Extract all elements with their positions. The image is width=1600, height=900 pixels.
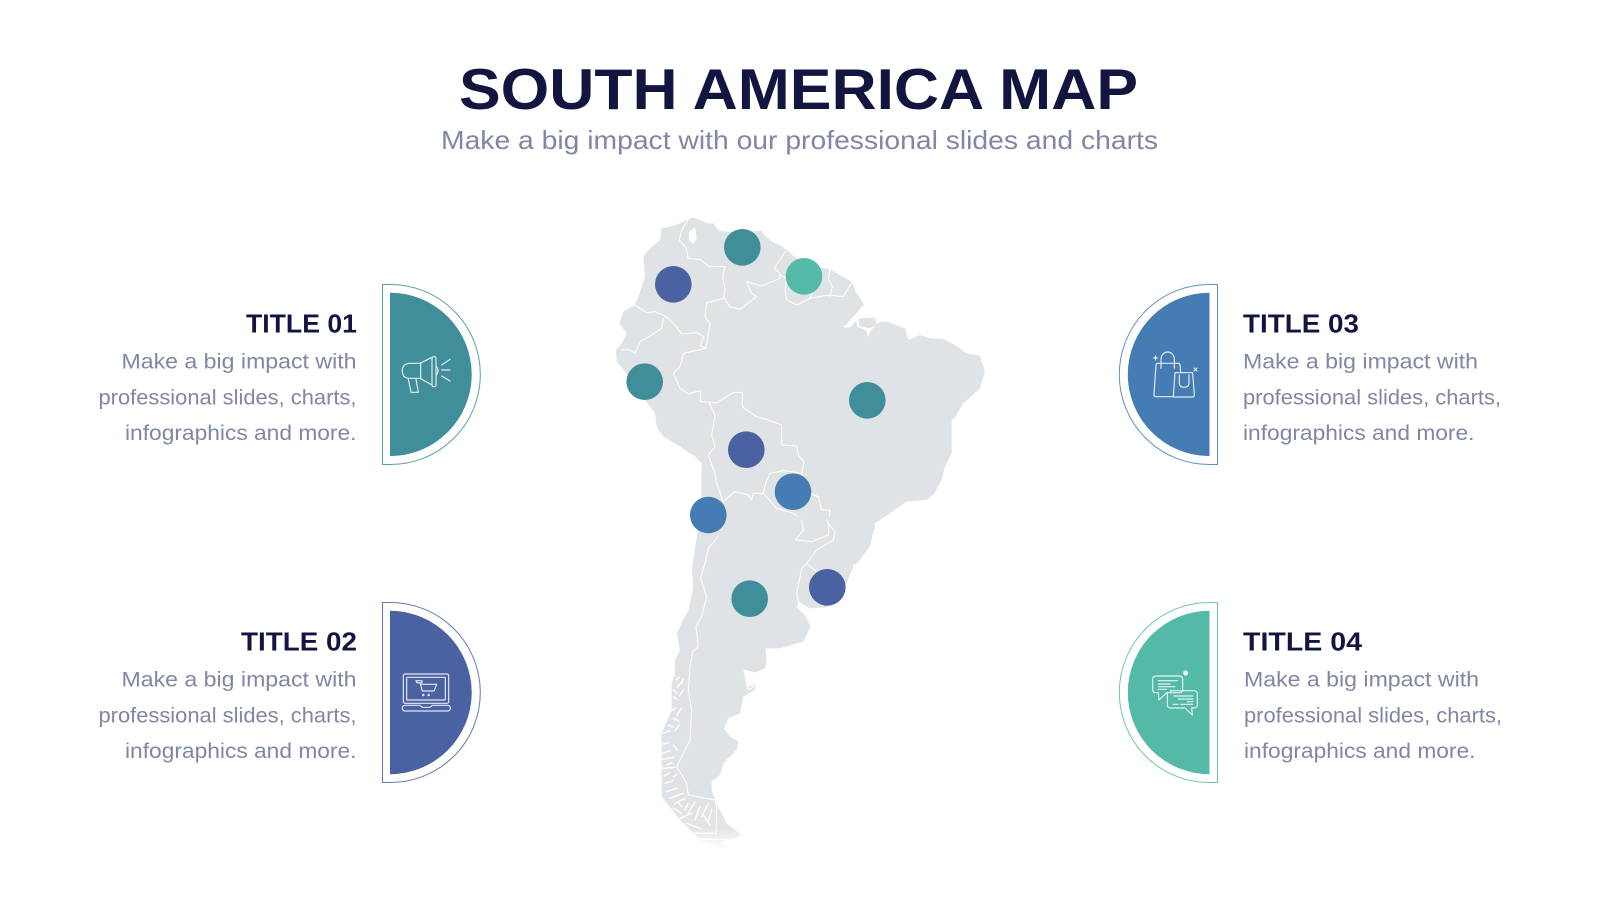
body text: infographics and more. (1244, 739, 1476, 763)
body text: professional slides, charts, (98, 385, 356, 409)
panel: title 03 (1119, 284, 1501, 464)
icon: shopping bags (1154, 352, 1197, 397)
body text: professional slides, charts, (1243, 385, 1501, 409)
marker: Peru (626, 363, 663, 400)
heading: TITLE 02 (241, 629, 357, 657)
map: southern landmass (662, 517, 877, 848)
body text (98, 667, 356, 763)
icon: megaphone (402, 357, 450, 392)
marker: Chile (690, 497, 727, 533)
heading: TITLE 03 (1243, 311, 1359, 339)
body text (1243, 349, 1501, 445)
body text: Make a big impact with (1244, 667, 1479, 691)
marker: Venezuela (724, 229, 761, 266)
half circle (382, 602, 480, 782)
map: South America (616, 217, 985, 848)
body text: infographics and more. (1243, 421, 1474, 445)
map markers (626, 229, 886, 617)
marker: Guyana (786, 258, 822, 295)
half circle (1119, 602, 1218, 782)
half circle (1119, 284, 1218, 464)
heading: TITLE 01 (246, 311, 357, 339)
body text: professional slides, charts, (98, 703, 356, 727)
marker: Bolivia (728, 431, 765, 468)
body text: infographics and more. (125, 421, 356, 445)
panel: title 04 (1119, 602, 1502, 782)
panel: title 02 (98, 602, 480, 782)
icon: chat bubbles (1153, 671, 1197, 715)
body text: Make a big impact with (1243, 349, 1478, 373)
body text: Make a big impact with (122, 667, 356, 691)
map: northern landmass (616, 217, 985, 530)
marker: Paraguay (775, 473, 811, 510)
body text (98, 349, 356, 445)
marker: Argentina (731, 580, 768, 617)
body text: Make a big impact with (122, 349, 356, 373)
body text: professional slides, charts, (1244, 703, 1502, 727)
subtitle: Make a big impact with our professional slides and charts (441, 125, 1158, 155)
body text (1244, 667, 1502, 763)
heading: TITLE 04 (1243, 629, 1363, 657)
panel: title 01 (98, 284, 480, 464)
marker: Uruguay (809, 569, 846, 606)
icon: laptop with cart (402, 674, 450, 711)
half circle (382, 284, 480, 464)
title: SOUTH AMERICA MAP (459, 58, 1138, 122)
body text: infographics and more. (125, 739, 356, 763)
marker: Colombia (655, 266, 692, 303)
marker: Brazil (849, 382, 886, 419)
